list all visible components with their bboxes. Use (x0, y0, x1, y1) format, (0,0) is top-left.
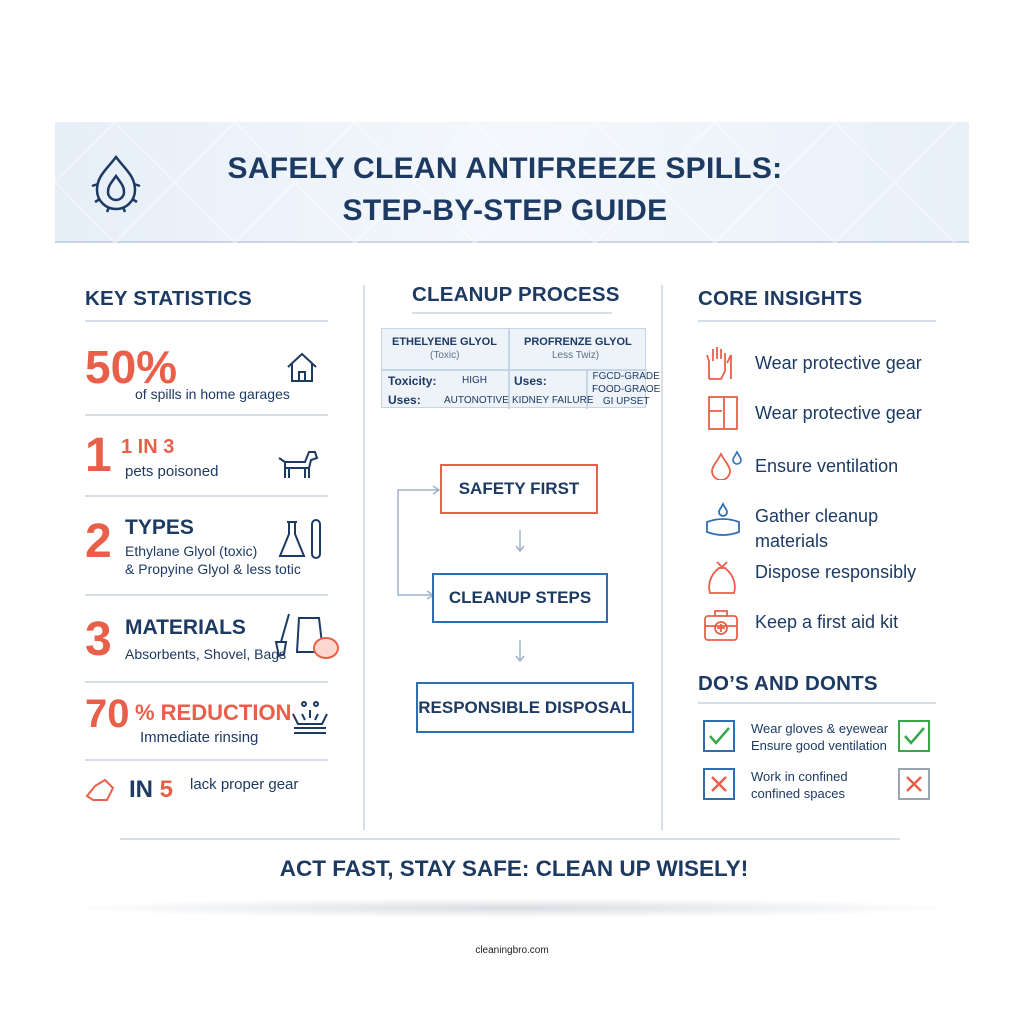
insight: bag (708, 561, 916, 594)
stat: 2 types: TYPES (125, 516, 194, 539)
source credit: cleaningbro.com (475, 945, 549, 956)
dont row: Work in confined (751, 769, 848, 784)
stat: in 5: lack proper gear (190, 776, 298, 793)
insight: first aid: Keep a first aid kit (755, 612, 898, 632)
header banner (55, 122, 969, 243)
insight: sponge: materials (755, 531, 828, 551)
stat: 2 types: 2 (85, 515, 112, 568)
dont row (703, 768, 930, 801)
stat: 50% (85, 341, 317, 402)
icon: splash (292, 701, 328, 734)
stat: in 5: IN 5 (129, 776, 173, 803)
comparison table: KIDNEY FAILURE (512, 395, 594, 406)
step: responsible disposal (416, 682, 634, 733)
comparison table (381, 328, 646, 408)
stat: 70% reduction (85, 692, 328, 746)
stat: 2 types (85, 515, 321, 577)
arrow: down 2 (516, 640, 524, 662)
stat: in 5 (86, 776, 298, 803)
insight: sponge: Gather cleanup (755, 506, 878, 526)
comparison table: Uses: (514, 374, 547, 388)
title: STEP-BY-STEP GUIDE (343, 194, 667, 227)
comparison table: GI UPSET (603, 396, 650, 407)
icon: drop in gear (92, 155, 140, 212)
insight: cabinet (708, 396, 922, 430)
stat: 70% reduction: Immediate rinsing (140, 729, 258, 746)
icon: dog (278, 451, 318, 478)
icon: flask (278, 519, 321, 559)
stat: 3 materials: 3 (85, 613, 112, 666)
column dividers (363, 285, 365, 830)
stat: 1 in 3 (85, 429, 318, 482)
heading: core insights: CORE INSIGHTS (698, 287, 862, 310)
comparison table: (Toxic) (430, 350, 459, 361)
step: responsible disposal: RESPONSIBLE DISPOSAL (418, 698, 632, 716)
title (228, 152, 782, 227)
icon: house (287, 352, 317, 382)
stat: 70% reduction: 70 (85, 692, 130, 736)
insight: drops: Ensure ventilation (755, 456, 898, 476)
footer slogan: ACT FAST, STAY SAFE: CLEAN UP WISELY! (280, 856, 748, 881)
comparison table: ETHELYENE GLYOL (392, 336, 497, 348)
stat: 3 materials (85, 613, 339, 666)
comparison table: PROFRENZE GLYOL (524, 336, 632, 348)
step: cleanup steps (432, 573, 608, 623)
comparison table: AUTONOTIVE (444, 395, 509, 406)
step: safety first (440, 464, 598, 514)
heading: key statistics: KEY STATISTICS (85, 287, 252, 310)
panel: core insights (698, 287, 936, 801)
comparison table: Toxicity: (388, 374, 436, 388)
step: safety first: SAFETY FIRST (459, 479, 579, 498)
step: cleanup steps: CLEANUP STEPS (449, 588, 591, 607)
heading: cleanup process: CLEANUP PROCESS (412, 283, 620, 306)
do row: Wear gloves & eyewear (751, 721, 888, 736)
insight: sponge (706, 502, 878, 551)
comparison table: FGCD-GRADE (593, 371, 660, 382)
stat: 2 types: & Propyine Glyol & less totic (125, 561, 301, 577)
stat: 1 in 3: 1 (85, 429, 112, 482)
comparison table: Uses: (388, 393, 421, 407)
do row (703, 720, 930, 753)
insight: cabinet: Wear protective gear (755, 403, 922, 423)
stat: 2 types: Ethylane Glyol (toxic) (125, 543, 257, 559)
panel: cleanup process (381, 283, 660, 733)
comparison table: Less Twiz) (552, 350, 599, 361)
insight: gloves: Wear protective gear (755, 353, 922, 373)
stat: 70% reduction: % REDUCTION (135, 700, 291, 725)
stat: 50%: of spills in home garages (135, 386, 290, 402)
stat: 1 in 3: pets poisoned (125, 463, 218, 480)
do row: Ensure good ventilation (751, 738, 887, 753)
comparison table: HIGH (462, 375, 487, 386)
insight: gloves (706, 347, 922, 380)
stat: 3 materials: MATERIALS (125, 616, 246, 639)
heading: dos and donts: DO’S AND DONTS (698, 672, 878, 695)
dont row: confined spaces (751, 786, 845, 801)
stat: 3 materials: Absorbents, Shovel, Bags (125, 646, 286, 662)
icon: shovel bag sponge (274, 614, 339, 659)
stat: 50%: 50% (85, 341, 177, 393)
arrow: loop bracket (397, 486, 440, 600)
stat: 1 in 3: 1 IN 3 (121, 436, 174, 458)
insight: bag: Dispose responsibly (755, 562, 916, 582)
insight: drops (711, 450, 898, 480)
comparison table: FOOD-GRAOE (592, 384, 660, 394)
title: SAFELY CLEAN ANTIFREEZE SPILLS: (228, 152, 782, 185)
insight: first aid (704, 610, 898, 641)
panel: key statistics (85, 287, 339, 803)
arrow: down 1 (516, 530, 524, 552)
